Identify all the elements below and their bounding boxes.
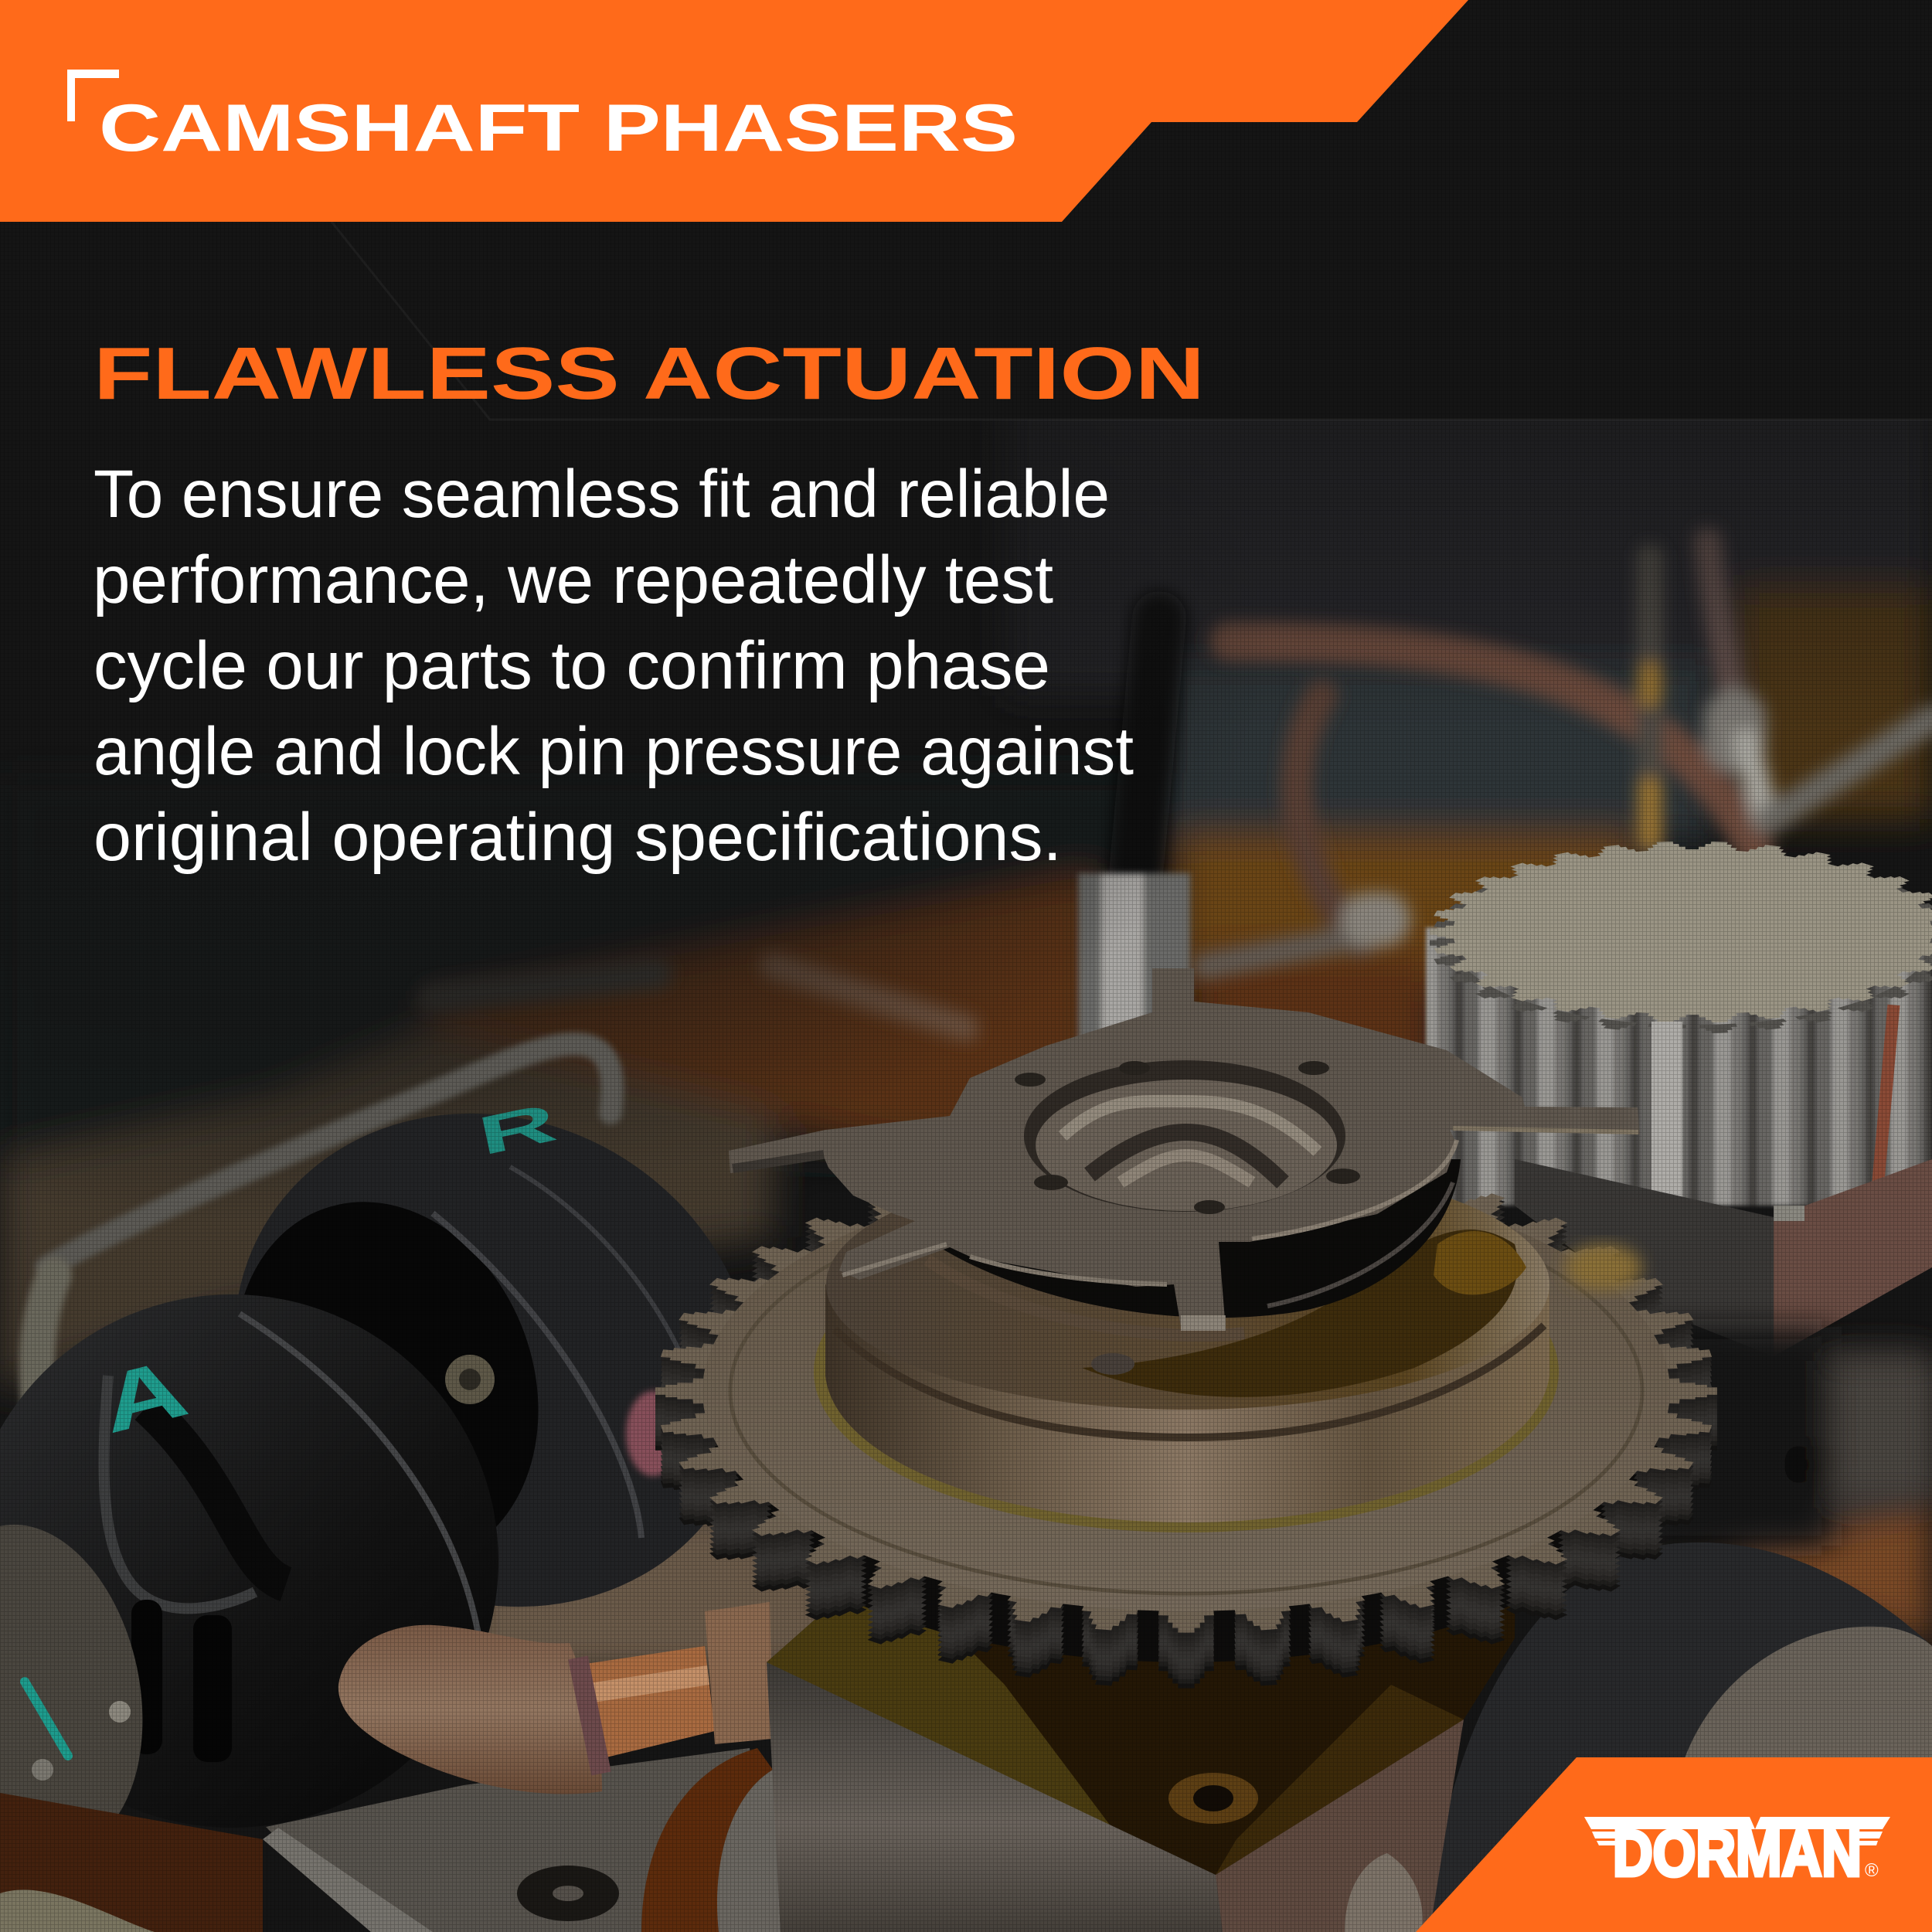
actuator: upper black cylinder bbox=[144, 1019, 845, 1701]
letter mark A: A bbox=[92, 1341, 196, 1451]
bottom tab end bbox=[1181, 1315, 1226, 1331]
lower-left tab edge bbox=[842, 1244, 947, 1275]
body copy: cycle our parts to confirm phase bbox=[94, 628, 1050, 703]
sprocket tooth side walls bbox=[661, 1156, 1712, 1685]
red rib bbox=[1872, 1005, 1900, 1186]
housing side wall bbox=[825, 1284, 1549, 1522]
body copy: angle and lock pin pressure against bbox=[94, 714, 1134, 789]
Dorman logo: ® bbox=[1865, 1860, 1879, 1881]
dark support and shaft behind sprocket bbox=[1646, 1329, 1932, 1546]
sprocket underside bbox=[701, 1220, 1672, 1662]
logo corner bbox=[1416, 1757, 1932, 1932]
gear body ribs bbox=[1426, 927, 1932, 1206]
plate body and tabs bbox=[729, 968, 1640, 1329]
gold oil ring bbox=[814, 1211, 1559, 1532]
left wires bbox=[37, 1044, 612, 1437]
small bolt bbox=[1091, 1353, 1134, 1375]
header banner bbox=[0, 0, 1468, 222]
thin angular outline bbox=[332, 222, 1932, 420]
body copy: To ensure seamless fit and reliable bbox=[94, 457, 1110, 532]
lock plate bbox=[729, 968, 1640, 1331]
copper tube bbox=[575, 1646, 715, 1762]
gear top disc bbox=[1453, 849, 1932, 1015]
sensor probe cylinder bbox=[1078, 873, 1190, 1043]
actuator: lower black cylinder bbox=[0, 1294, 498, 1828]
dark panel above photo bbox=[0, 0, 1932, 420]
gear tooth underside bbox=[1434, 853, 1932, 1032]
pink plug behind sprocket bbox=[626, 1391, 680, 1476]
steel block under sprocket bbox=[767, 1561, 1515, 1932]
sprocket tooth tips bbox=[661, 1152, 1712, 1630]
overlay: top darkening bbox=[0, 420, 1932, 729]
actuator: gauge face bbox=[0, 1505, 172, 1872]
gear support block bbox=[1515, 1159, 1932, 1356]
gear top teeth bbox=[1434, 842, 1932, 1022]
body copy: performance, we repeatedly test bbox=[93, 543, 1053, 617]
body copy: original operating specifications. bbox=[94, 800, 1062, 875]
overlay: left darkening bbox=[0, 155, 1468, 1314]
sprocket face bbox=[702, 1171, 1670, 1611]
sprocket bbox=[661, 1152, 1712, 1685]
phaser housing bbox=[814, 1159, 1559, 1532]
teal dash bbox=[25, 1682, 68, 1756]
gold tooth glint bbox=[1565, 1244, 1642, 1291]
plate lower edge bbox=[1252, 1140, 1457, 1239]
title: CAMSHAFT PHASERS bbox=[99, 91, 1018, 165]
housing band shadow bbox=[835, 1325, 1544, 1437]
plate rivet holes bbox=[1015, 1061, 1360, 1214]
photo background: pipes and rods bbox=[433, 541, 1932, 1028]
photo background: blurred workshop bbox=[0, 386, 1932, 1677]
centre opening bbox=[1024, 1060, 1345, 1212]
housing rim bbox=[826, 1159, 1549, 1410]
aluminium gear master bbox=[1426, 842, 1932, 1206]
pale rib highlight bbox=[1651, 1022, 1682, 1206]
bolt bbox=[445, 1355, 495, 1404]
coil spring under plate bbox=[912, 1159, 1461, 1335]
hub ring bbox=[730, 1189, 1642, 1594]
base plate and oil ring bbox=[0, 1748, 781, 1932]
countersunk bolt hole bbox=[517, 1866, 619, 1921]
Dorman logo: DORMAN bbox=[1613, 1817, 1862, 1889]
copper pipe bbox=[338, 1602, 773, 1794]
straight fitting bbox=[705, 1602, 773, 1744]
block bolt bbox=[1168, 1773, 1258, 1824]
oil pool bbox=[1082, 1230, 1518, 1397]
body copy bbox=[93, 457, 1134, 875]
title bracket bbox=[67, 70, 119, 121]
heading: FLAWLESS ACTUATION bbox=[94, 332, 1205, 415]
dark rubber wheel lower right bbox=[1430, 1543, 1932, 1932]
left tab edge bbox=[733, 1155, 824, 1168]
right tab edge bbox=[1453, 1128, 1638, 1132]
elbow fitting bbox=[338, 1625, 602, 1794]
letter mark R: R bbox=[473, 1092, 562, 1167]
solder seam bbox=[578, 1658, 601, 1774]
